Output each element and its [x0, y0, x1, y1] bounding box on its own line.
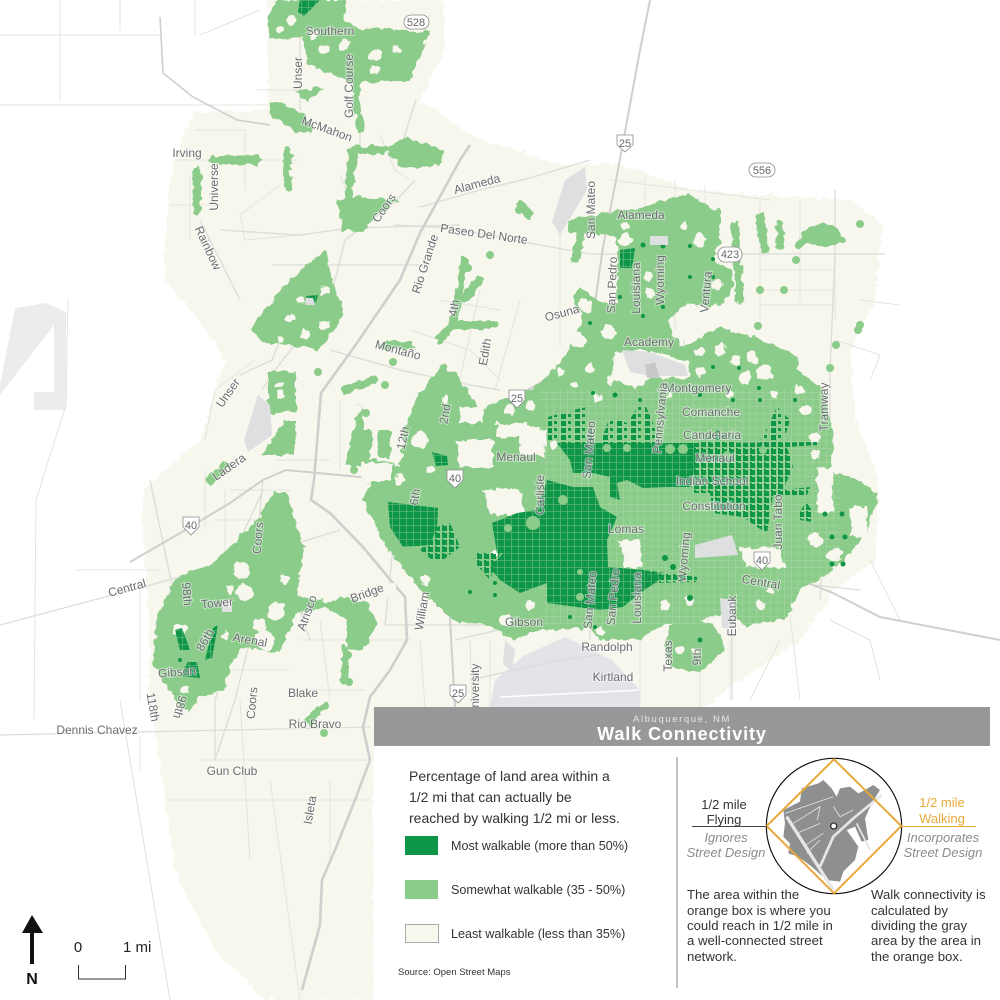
- flying label: Street Design: [687, 845, 765, 860]
- highway shields: 25: [619, 138, 631, 150]
- explanation: calculation: calculated by: [871, 903, 948, 918]
- scale bar: 0: [74, 939, 82, 956]
- gray open space features: [222, 167, 738, 670]
- street labels: Coors: [250, 521, 266, 555]
- dark green scattered hexagons: [178, 242, 848, 662]
- area: northeast small cluster: [800, 222, 845, 248]
- street labels: Texas: [661, 640, 675, 672]
- street labels: Pennsylvania: [650, 382, 670, 454]
- dark: downtown 6th street: [388, 502, 438, 547]
- street labels: Bridge: [348, 580, 386, 606]
- legend description: reached by walking 1/2 mi or less.: [409, 810, 620, 826]
- street labels: Montgomery: [665, 381, 731, 395]
- grid texture over walkable area: [540, 390, 840, 625]
- walking label: [902, 795, 982, 860]
- street labels: 2nd: [436, 403, 454, 425]
- dark: nob hill and university: [490, 480, 665, 610]
- highway shields: [183, 15, 775, 703]
- street labels: Candelaria: [683, 428, 741, 442]
- dark: western edge of downtown: [420, 523, 460, 560]
- street labels: Juan Tabo: [771, 494, 785, 550]
- street labels: San Pedro: [604, 256, 620, 314]
- scale bar: 1 mi: [123, 939, 151, 956]
- street labels: Tower: [200, 595, 234, 611]
- dark: west of university: [475, 552, 500, 580]
- street labels: Unser: [213, 376, 243, 410]
- explanation: orange box: The area within the: [687, 887, 799, 902]
- street labels: Arenal: [232, 630, 268, 650]
- street labels: 6th: [407, 488, 423, 506]
- highway shields: 25: [511, 393, 523, 405]
- street labels: Paseo Del Norte: [439, 221, 529, 247]
- scale bar: [74, 939, 151, 979]
- street labels: [56, 24, 831, 825]
- street labels: Alameda: [452, 171, 502, 197]
- street labels: Indian School: [676, 474, 748, 488]
- isolated hexagons: [314, 206, 864, 737]
- kirtland air force base: [490, 637, 640, 707]
- street labels: Louisiana: [630, 572, 644, 624]
- lighter patches within dark areas: [504, 444, 767, 601]
- legend description: Percentage of land area within a: [409, 768, 610, 784]
- explanation: calculation: area by the area in: [871, 933, 981, 948]
- highway shields: 423: [721, 249, 739, 261]
- street labels: Edith: [476, 337, 494, 367]
- flying label: Flying: [707, 812, 741, 827]
- street labels: Wyoming: [675, 532, 693, 582]
- highway shields: 528: [407, 17, 425, 29]
- explanation: orange box: a well-connected street: [687, 933, 823, 948]
- street labels: Menaul: [695, 451, 735, 465]
- street labels: Wyoming: [653, 255, 667, 305]
- street labels: Rio Grande: [409, 232, 441, 295]
- street labels: Lomas: [608, 522, 644, 536]
- highway shields: 40: [449, 473, 461, 485]
- area: west clusters: [346, 405, 396, 468]
- street labels: Southern: [306, 24, 354, 38]
- street labels: Gibson: [157, 663, 197, 681]
- title banner: Albuquerque, NM: [633, 714, 731, 725]
- street labels: Universe: [207, 163, 221, 211]
- walkshed diagram: [766, 758, 902, 894]
- area: southern and golf course: [267, 0, 430, 117]
- walking label: 1/2 mile: [919, 795, 965, 810]
- street labels: Irving: [172, 146, 202, 160]
- street labels: Academy: [624, 335, 674, 349]
- street labels: Ventura: [697, 270, 715, 313]
- street labels: Montaño: [374, 337, 423, 363]
- street labels: Ladera: [210, 450, 249, 483]
- street labels: San Mateo: [579, 420, 599, 480]
- highway shields: 556: [753, 165, 771, 177]
- street labels: Rainbow: [192, 224, 224, 272]
- walking label: Walking: [919, 811, 965, 826]
- legend: somewhat walkable: [405, 880, 625, 899]
- street labels: McMahon: [300, 113, 354, 145]
- legend: most walkable: Most walkable (more than 50%): [451, 839, 628, 853]
- street labels: Unser: [291, 57, 305, 89]
- legend: most walkable: [405, 836, 628, 855]
- highway shields: 40: [185, 520, 197, 532]
- street labels: Coors: [369, 191, 399, 225]
- street labels: Dennis Chavez: [56, 723, 138, 737]
- explanation: calculation: Walk connectivity is: [871, 887, 986, 902]
- legend: least walkable: Least walkable (less than 35%): [451, 927, 625, 941]
- highway shields: 25: [452, 688, 464, 700]
- explanation: calculation: the orange box.: [871, 949, 963, 964]
- street labels: Gibson: [505, 615, 543, 629]
- dark: small clusters: [432, 452, 448, 466]
- area: mcmahon and paradise: [270, 103, 313, 133]
- highway shields: 40: [756, 555, 768, 567]
- panel divider: [676, 757, 678, 988]
- legend: least walkable: [406, 924, 625, 942]
- street labels: Louisiana: [629, 262, 643, 314]
- street labels: 9th: [690, 649, 704, 665]
- street labels: Gun Club: [207, 764, 258, 778]
- legend description: 1/2 mi that can actually be: [409, 789, 572, 805]
- area: montano cluster: [250, 250, 345, 350]
- street labels: San Mateo: [580, 570, 600, 630]
- explanation: calculation: [871, 887, 986, 964]
- street labels: Golf Course: [342, 54, 356, 118]
- legend and explanation panel: [374, 707, 1000, 1000]
- street labels: Kirtland: [593, 670, 633, 684]
- street labels: Coors: [244, 686, 260, 720]
- street labels: Osuna: [543, 302, 581, 324]
- street labels: 118th: [144, 691, 162, 723]
- street labels: Central: [741, 572, 781, 592]
- explanation: orange box: could reach in 1/2 mile in: [687, 918, 833, 933]
- dark: menaul band west: [557, 443, 695, 500]
- explanation: calculation: dividing the gray: [871, 918, 967, 933]
- street labels: San Mateo: [584, 181, 598, 239]
- walking label: Incorporates: [907, 830, 980, 845]
- street labels: Menaul: [496, 450, 536, 464]
- street labels: Central: [107, 576, 147, 600]
- street labels: Atrisco: [294, 593, 320, 633]
- area: central and northeast albuquerque: [362, 195, 878, 640]
- street labels: 4th: [446, 299, 462, 317]
- explanation: orange box: orange box is where you: [687, 903, 831, 918]
- street labels: Tramway: [817, 383, 831, 431]
- street labels: Rio Bravo: [289, 717, 342, 731]
- flying label: [687, 797, 767, 860]
- explanation: orange box: [687, 887, 833, 964]
- title banner: Walk Connectivity: [597, 724, 767, 744]
- street labels: Randolph: [581, 640, 633, 654]
- major roads: [0, 20, 885, 760]
- street labels: William: [412, 591, 432, 631]
- street labels: Carlisle: [533, 475, 547, 515]
- street labels: Eubank: [725, 595, 739, 636]
- legend: somewhat walkable: Somewhat walkable (35 - 50%): [451, 883, 625, 897]
- walking label: Street Design: [904, 845, 982, 860]
- street labels: University: [468, 664, 482, 716]
- explanation: orange box: network.: [687, 949, 737, 964]
- flying label: 1/2 mile: [701, 797, 747, 812]
- dark: upper fingers: [548, 407, 593, 443]
- street labels: Constitution: [682, 499, 746, 513]
- title banner: [374, 707, 990, 746]
- street labels: 98th: [170, 694, 190, 720]
- north arrow: [22, 915, 43, 988]
- legend description: [409, 768, 620, 826]
- west airport and thin boundary: [0, 298, 68, 720]
- street labels: 86th: [193, 626, 217, 654]
- street labels: Comanche: [682, 405, 740, 419]
- street labels: Isleta: [301, 794, 319, 825]
- hexagon holes: [174, 15, 867, 694]
- source note: Source: Open Street Maps: [398, 967, 511, 978]
- street labels: 98th: [179, 582, 195, 606]
- somewhat walkable hexagon areas: [153, 0, 878, 720]
- flying label: Ignores: [704, 830, 748, 845]
- street labels: San Pedro: [604, 568, 622, 626]
- street labels: Blake: [288, 686, 318, 700]
- dark: menaul band east: [690, 442, 817, 533]
- north arrow: N: [26, 971, 38, 988]
- street labels: Alameda: [617, 208, 665, 222]
- street labels: 12th: [394, 425, 412, 451]
- map base: least walkable area: [143, 0, 882, 1000]
- area: 9th street: [665, 615, 725, 672]
- area: west mesa: [153, 492, 378, 713]
- most walkable dark green areas: [175, 0, 817, 678]
